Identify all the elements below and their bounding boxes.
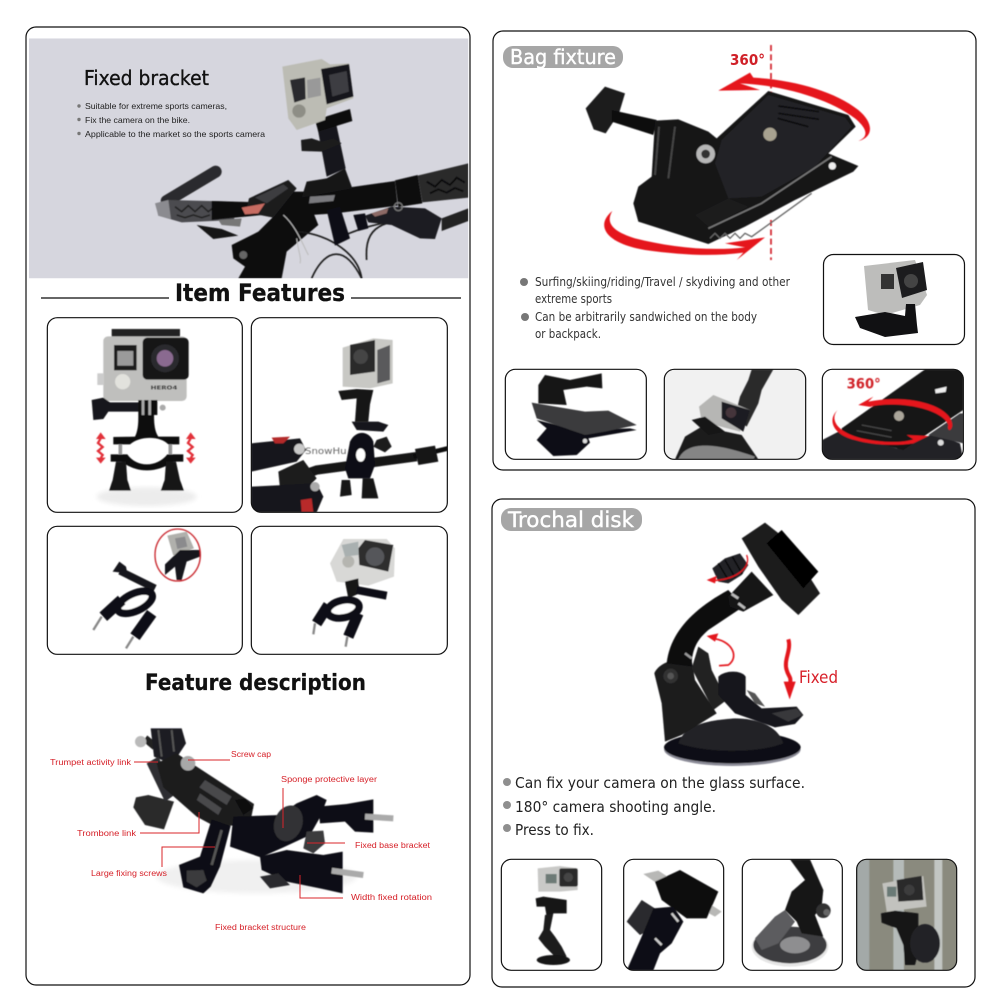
label pill: Bag fixture: Bag fixture (510, 45, 616, 69)
callouts: bracket part labels: Trombone link (77, 829, 137, 838)
bullet list: bag fixture uses: Can be arbitrarily sandwiched on the body (535, 310, 757, 324)
banner: bike handlebar with camera (29, 38, 468, 278)
bullet list: suction cup features (503, 774, 805, 839)
bullet list: bag fixture uses: or backpack. (535, 327, 601, 341)
label: 360 degrees: 360° (730, 51, 765, 69)
callouts: bracket part labels: Trumpet activity link (50, 758, 132, 767)
photo strip: suction cup views (501, 859, 957, 970)
panel: bag fixture (493, 31, 976, 470)
thumbnail grid: item features (47, 318, 448, 654)
callouts: bracket part labels: Fixed base bracket (355, 841, 431, 850)
callouts: bracket part labels: Width fixed rotation (351, 893, 432, 902)
heading: Feature description: Feature description (145, 671, 366, 696)
bullet list: bag fixture uses (520, 275, 790, 341)
thumbnail: camera on bar clamp with arrows: HERO4 (151, 385, 178, 391)
thumbnail: clip top with 360 arrows: 360° (847, 376, 881, 392)
callouts: bracket part labels: Fixed bracket structure (215, 923, 307, 932)
panel: trochal disk (492, 499, 975, 987)
diagram: bracket structure photo (133, 728, 393, 893)
thumbnail: camera on bar clamp with arrows (47, 318, 242, 512)
thumbnail: camera on tripod pole: SnowHu (305, 447, 347, 457)
thumbnail: adjustment knob close-up (624, 859, 724, 970)
photo: suction cup mount with arrows (654, 523, 820, 766)
photo: rotating backpack clip with arrows (586, 45, 870, 260)
label pill: Trochal disk: Trochal disk (507, 508, 635, 532)
bullet list: bag fixture uses: extreme sports (535, 292, 612, 306)
bullet list: bracket uses: Applicable to the market so the sports camera (85, 129, 265, 139)
thumbnail: camera on bag strap (664, 369, 806, 459)
callouts: bracket part labels: Large fixing screws (91, 869, 167, 878)
thumbnail: clip side view (505, 369, 646, 459)
bullet list: suction cup features: Can fix your camera on the glass surface. (515, 774, 805, 792)
bullet list: bracket uses: Suitable for extreme sports cameras, (85, 101, 227, 111)
callouts: bracket part labels (50, 750, 432, 932)
panel: fixed bracket (26, 27, 470, 985)
thumbnail: camera mounted on window (857, 859, 957, 970)
callouts: bracket part labels: Screw cap (231, 750, 272, 759)
thumbnail: camera on suction mount (501, 859, 602, 970)
label: Fixed: Fixed (799, 668, 838, 688)
bullet list: bracket uses: Fix the camera on the bike. (85, 115, 190, 125)
thumbnail: clip top with 360 arrows (822, 369, 963, 459)
thumbnail: camera on tripod pole (251, 318, 448, 512)
callouts: bracket part labels: Sponge protective layer (281, 775, 377, 784)
bullet list: bag fixture uses: Surfing/skiing/riding/Travel / skydiving and other (535, 275, 790, 289)
thumbnail: suction base close-up (742, 859, 842, 970)
bullet list: suction cup features: 180° camera shooting angle. (515, 798, 716, 816)
bullet list: bracket uses (77, 101, 265, 139)
inset: camera on clip (824, 254, 964, 344)
bullet list: suction cup features: Press to fix. (515, 821, 594, 839)
thumbnail: clamp with inset circle (47, 526, 242, 654)
heading: Fixed bracket: Fixed bracket (84, 66, 209, 90)
photo strip: clip views (505, 369, 963, 459)
section heading: Item Features: Item Features (175, 279, 345, 307)
thumbnail: clamp with camera (251, 526, 447, 654)
